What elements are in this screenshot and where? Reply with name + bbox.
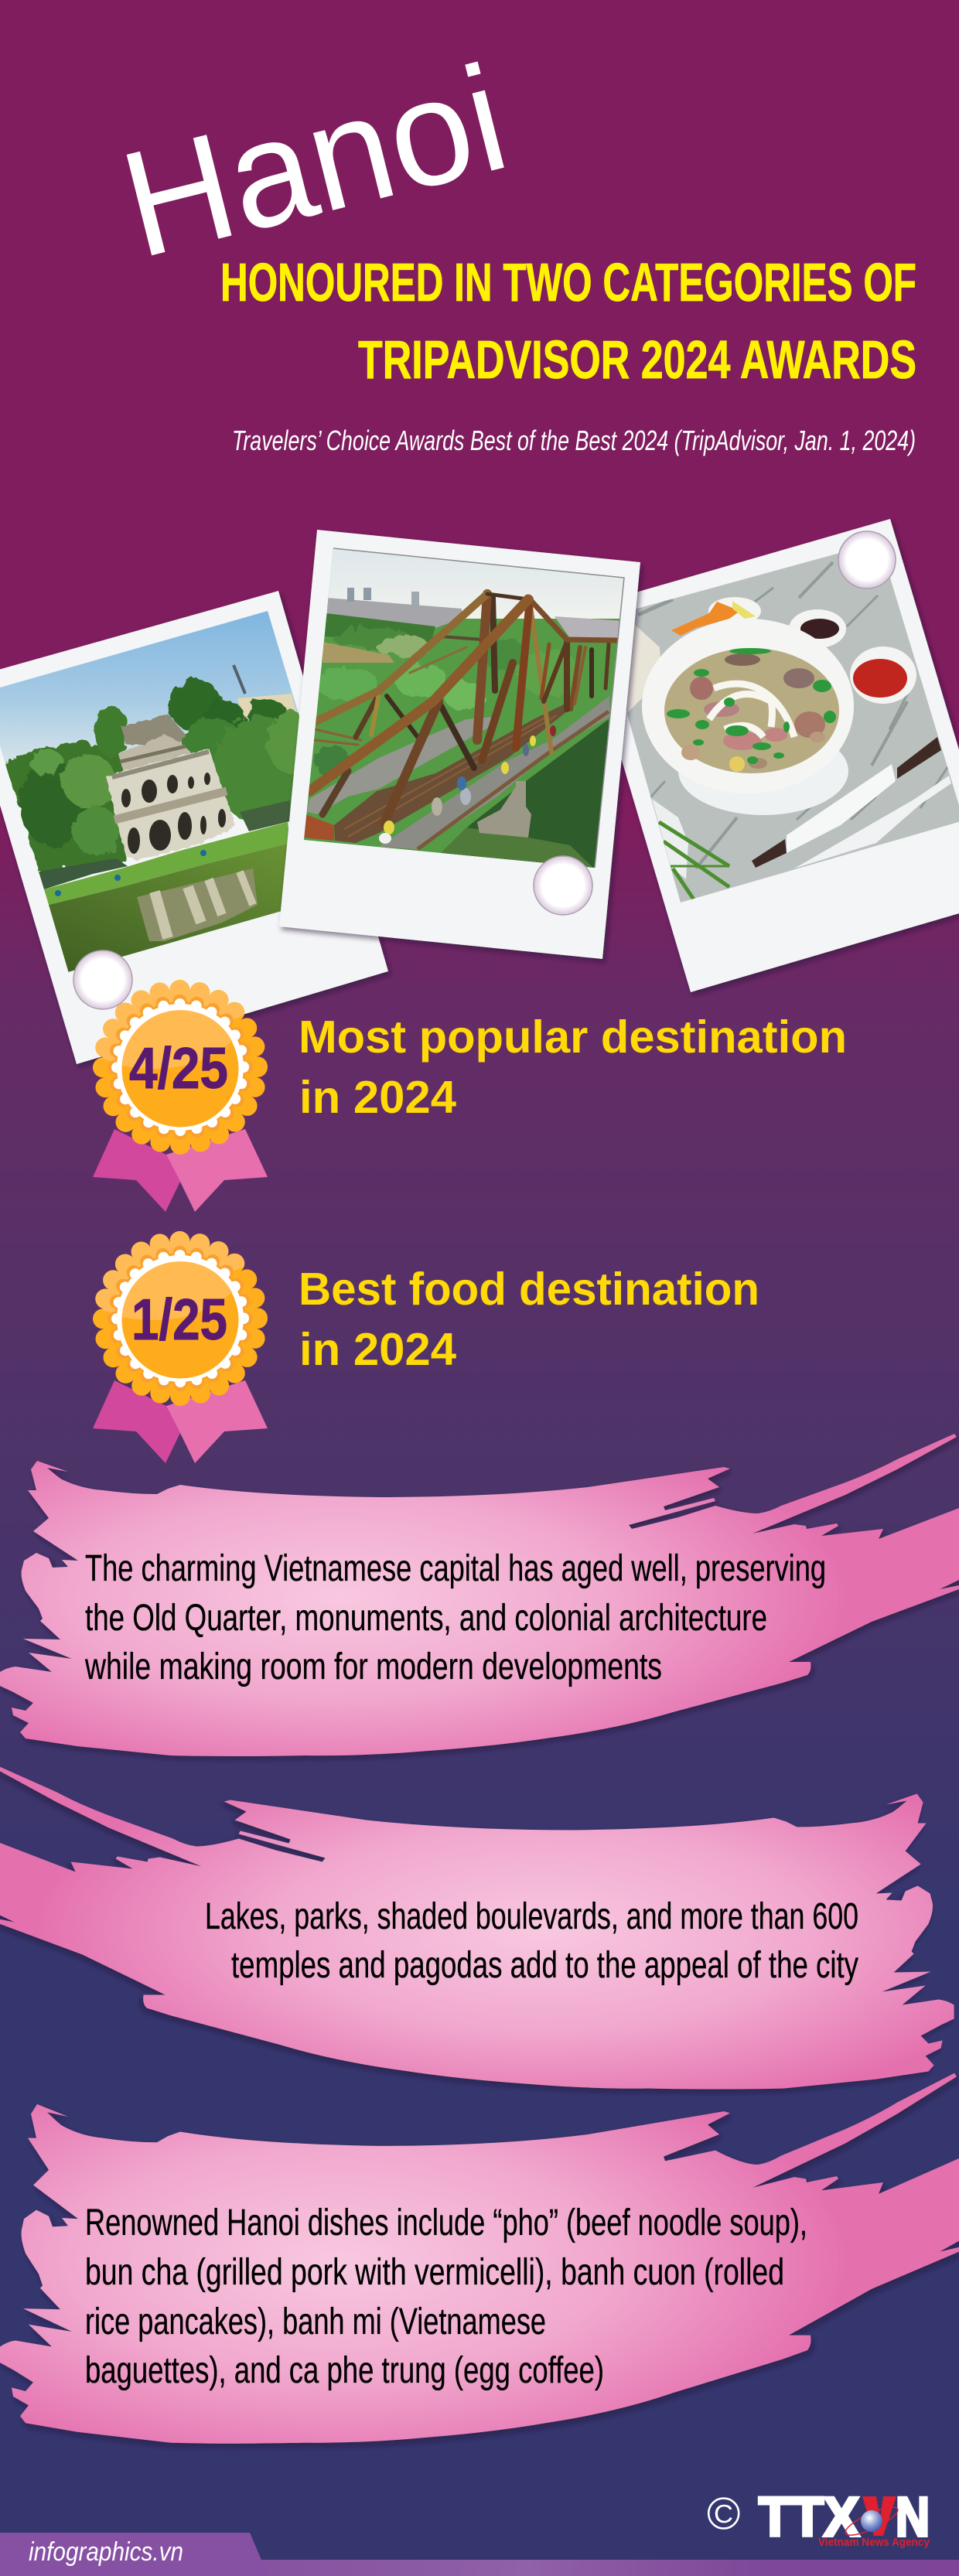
text: banner 1: the Old Quarter, monuments, and colonial architecture bbox=[85, 1598, 767, 1639]
photo card: pho bowl bbox=[622, 519, 959, 997]
copyright mark bbox=[708, 2498, 739, 2529]
label: best food destination: in 2024 bbox=[299, 1324, 456, 1375]
text: banner 3 bbox=[85, 2202, 807, 2391]
logo: TTXVN Vietnam News Agency: Vietnam News Agency bbox=[818, 2537, 930, 2549]
footer tab: infographics.vn bbox=[0, 2533, 268, 2576]
badge: 4/25 medal bbox=[93, 990, 268, 1212]
title: Hanoi: Hanoi bbox=[107, 33, 521, 290]
text: banner 3: rice pancakes), banh mi (Vietnamese bbox=[85, 2301, 546, 2342]
text: banner 3: baguettes), and ca phe trung (egg coffee) bbox=[85, 2350, 604, 2391]
text: banner 1: while making room for modern developments bbox=[84, 1646, 662, 1687]
label: most popular destination: Most popular destination bbox=[299, 1012, 847, 1063]
logo: TTXVN Vietnam News Agency: N bbox=[896, 2487, 930, 2548]
text: banner 3: bun cha (grilled pork with vermicelli), banh cuon (rolled bbox=[85, 2252, 784, 2293]
badge: 1/25 medal bbox=[93, 1241, 268, 1463]
photo pin: right card bbox=[838, 531, 896, 589]
label: most popular destination: in 2024 bbox=[299, 1072, 456, 1123]
text: banner 1 bbox=[84, 1548, 826, 1687]
logo: TTXVN Vietnam News Agency bbox=[759, 2487, 930, 2549]
label: best food destination bbox=[299, 1264, 759, 1375]
label: best food destination: Best food destination bbox=[299, 1264, 759, 1315]
footer tab: infographics.vn: infographics.vn bbox=[29, 2537, 183, 2567]
footer bar bbox=[0, 2560, 959, 2576]
photo pin: left card bbox=[73, 950, 132, 1009]
label: most popular destination bbox=[299, 1012, 847, 1123]
banner 3: renowned dishes bbox=[0, 2073, 959, 2444]
copyright mark: C bbox=[714, 2499, 733, 2528]
photo card: Turtle Tower bbox=[0, 591, 388, 1064]
logo: TTXVN Vietnam News Agency: TTX bbox=[759, 2487, 859, 2548]
headline bbox=[220, 252, 916, 390]
photo card: Long Bien Bridge bbox=[279, 530, 640, 959]
photo pin: middle card bbox=[534, 856, 592, 915]
badge: 4/25 medal: 4/25 bbox=[129, 1036, 228, 1100]
banner 2: lakes and pagodas bbox=[0, 1766, 954, 2090]
banner 1: charming capital bbox=[0, 1434, 959, 1756]
text: banner 2 bbox=[205, 1896, 858, 1986]
badge: 1/25 medal: 1/25 bbox=[131, 1287, 227, 1352]
